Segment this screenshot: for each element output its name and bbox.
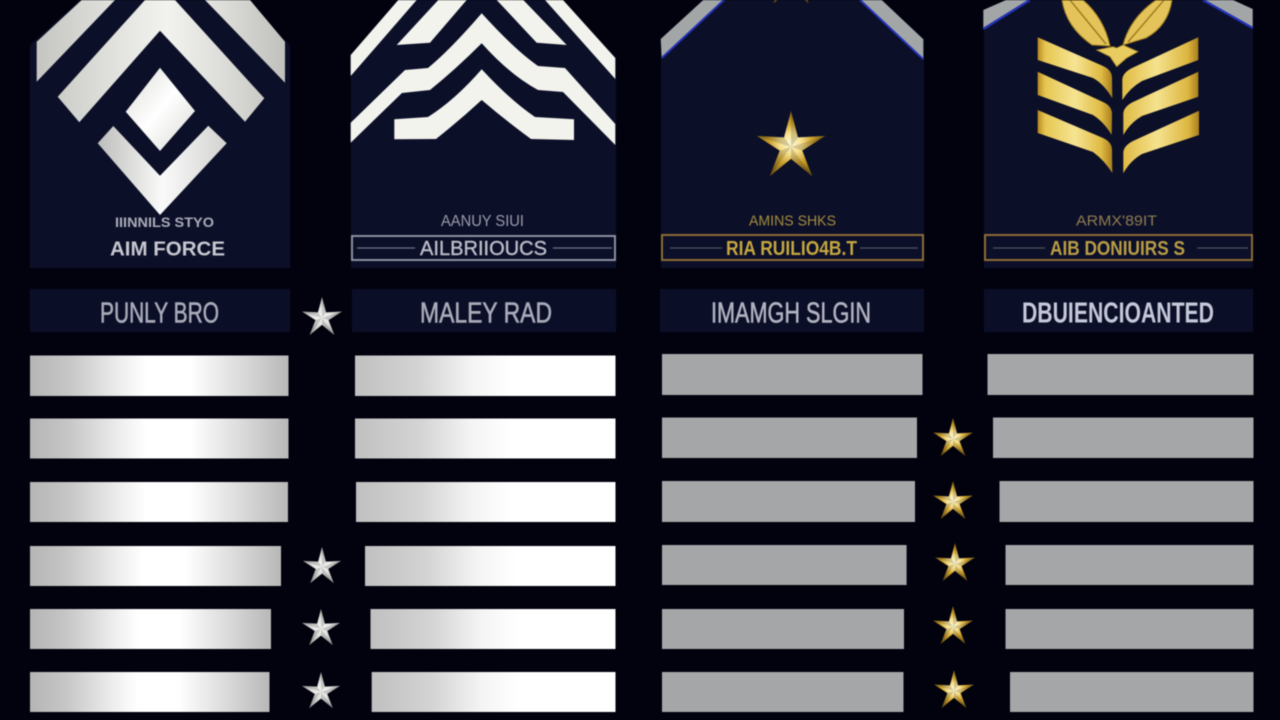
text: column 2 name: MALEY RAD bbox=[420, 298, 552, 330]
text: air force small caption: IIINNILS STYO bbox=[115, 214, 214, 230]
army label box bbox=[352, 236, 615, 260]
text: star caption: AMINS SHKS bbox=[749, 212, 836, 230]
text: air force label: AIM FORCE bbox=[110, 238, 225, 260]
icon: top chevron bbox=[983, 0, 1253, 29]
star label box bbox=[662, 235, 923, 260]
bars: column 3 grey bbox=[662, 354, 922, 712]
text: column 3 name: IMAMGH SLGIN bbox=[711, 298, 871, 330]
icon: clipped top star bbox=[762, 0, 820, 3]
text: gold caption: ARMX'89IT bbox=[1076, 212, 1157, 230]
icon: gold leaves bbox=[1062, 0, 1172, 67]
bars: column 4 grey bbox=[988, 354, 1254, 712]
panel: air force insignia bbox=[30, 0, 290, 268]
text: gold label: AIB DONIUIRS S bbox=[1050, 238, 1185, 260]
icon: gold star bbox=[757, 111, 825, 176]
bars: column 2 silver bbox=[355, 356, 616, 712]
panel: gold chevron insignia bbox=[983, 0, 1253, 268]
name bar: column 4 bbox=[984, 289, 1253, 332]
text: column 4 name: DBUIENCIOANTED bbox=[1022, 298, 1214, 330]
stars: gold bbox=[933, 418, 975, 708]
icon: gold chevrons right bbox=[1122, 37, 1199, 173]
name bar: column 2 bbox=[352, 289, 616, 332]
icon: top chevron bbox=[661, 0, 923, 59]
name bar: column 1 bbox=[30, 289, 290, 332]
text: army label: AILBRIIOUCS bbox=[420, 238, 547, 260]
panel: army insignia bbox=[351, 0, 616, 268]
icon: silver chevrons and diamond bbox=[37, 0, 285, 215]
panel: star insignia bbox=[661, 0, 924, 268]
icon: white chevrons bbox=[351, 0, 615, 145]
stars: silver bbox=[302, 297, 342, 708]
text: star label: RIA RUILIO4B.T bbox=[726, 238, 857, 260]
bars: column 1 silver bbox=[30, 356, 288, 712]
text: army small caption: AANUY SIUI bbox=[441, 213, 524, 230]
icon: gold chevrons left bbox=[1038, 37, 1112, 173]
text: column 1 name: PUNLY BRO bbox=[100, 298, 219, 330]
gold label box bbox=[985, 235, 1252, 260]
name bar: column 3 bbox=[660, 289, 924, 332]
